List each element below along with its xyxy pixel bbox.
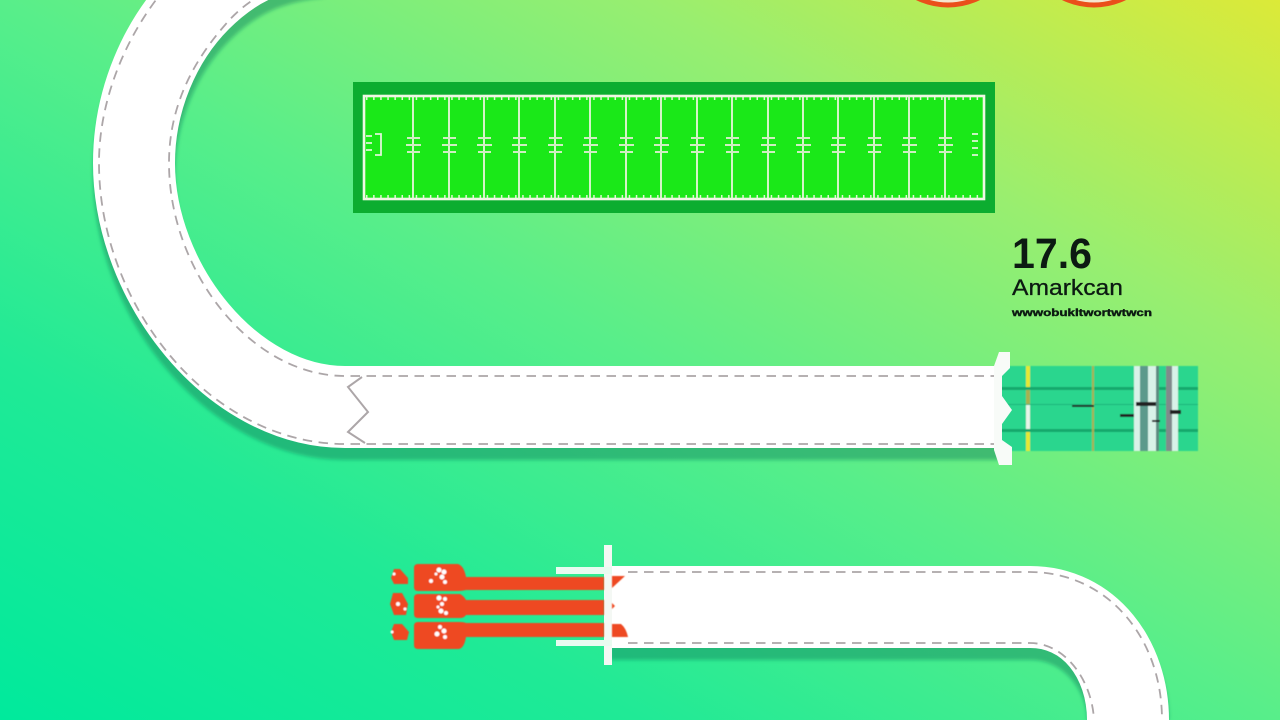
zigzag tear on road	[348, 377, 368, 443]
hash marks	[406, 138, 953, 152]
statistic callout: 17.6	[1012, 230, 1092, 278]
football field	[353, 82, 995, 213]
upper curved road band	[99, 0, 1000, 444]
red arrows	[390, 564, 628, 649]
road start cap	[556, 545, 612, 665]
statistic callout	[1011, 230, 1152, 319]
yard lines	[413, 96, 945, 199]
green tape strip with marks	[1001, 366, 1198, 451]
road end cap bracket	[994, 352, 1012, 465]
goal marks	[366, 134, 978, 155]
top circles cropped by the page edge	[878, 0, 1164, 5]
lower curved road band	[610, 572, 1162, 720]
field edge ticks	[366, 98, 981, 196]
arrow speckles	[390, 568, 448, 639]
statistic callout: wwwobukltwortwtwcn	[1011, 308, 1152, 319]
statistic callout: Amarkcan	[1012, 275, 1123, 300]
